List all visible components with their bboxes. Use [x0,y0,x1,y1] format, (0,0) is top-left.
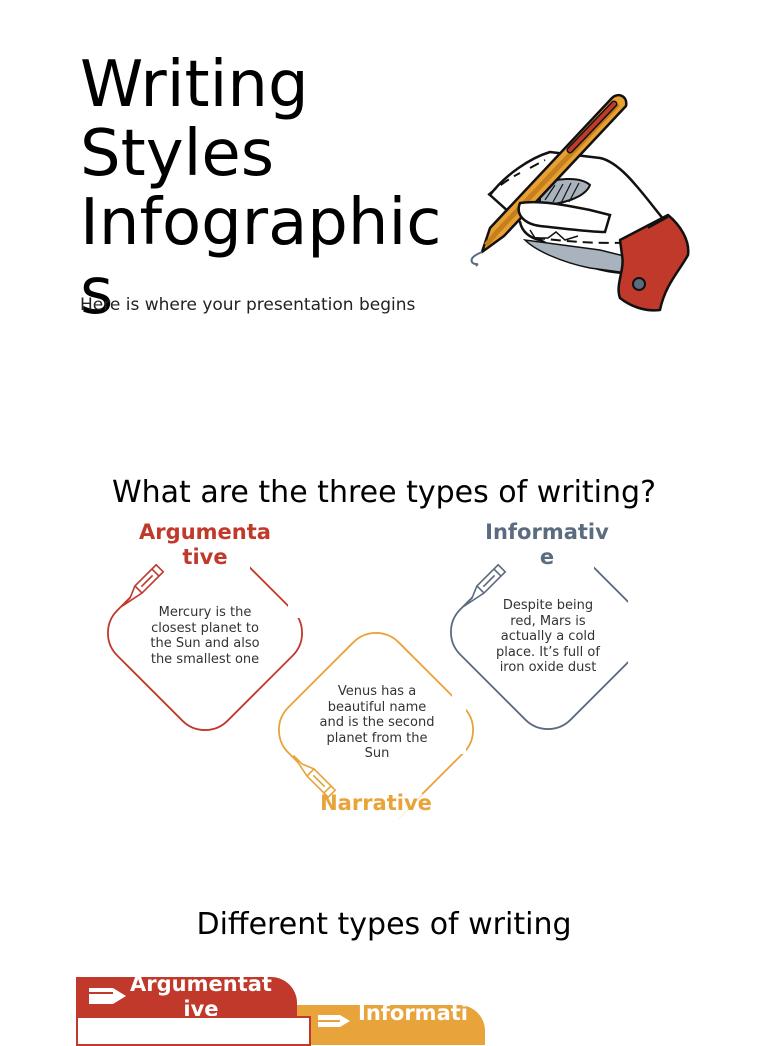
heading: different types: Different types of writing [196,907,572,942]
pen [472,95,626,266]
text: informative: Despite being red, Mars is actually a cold place. It’s full of iron oxide dust [496,598,600,675]
white content box [76,1016,311,1046]
heading: three types: What are the three types of writing? [112,475,656,510]
text: argumentative: Mercury is the closest planet to the Sun and also the smallest one [150,605,260,666]
thumb over pen [519,202,610,232]
label: Argumentat ive [130,972,272,1021]
subtitle: Here is where your presentation begins [80,295,415,315]
label: informative: Informativ e [485,520,609,569]
diamond: narrative [266,620,486,842]
illustration: hand writing with pen [470,94,690,312]
diamond: argumentative [95,520,315,743]
title: Writing Styles Infographic s [80,48,441,329]
text: narrative: Venus has a beautiful name and is the second planet from the Sun [320,684,434,761]
tab: argumentative (red) [76,977,297,1037]
tab: informative (orange) [290,1005,485,1045]
cuff [619,215,688,310]
diamond: informative [438,520,658,742]
icon: pencil [89,988,126,1004]
label: argumentative: Argumenta tive [139,520,271,569]
label: Informati [358,1001,468,1025]
label: narrative: Narrative [320,791,432,815]
icon: pencil [318,1015,350,1027]
hand [488,152,680,275]
